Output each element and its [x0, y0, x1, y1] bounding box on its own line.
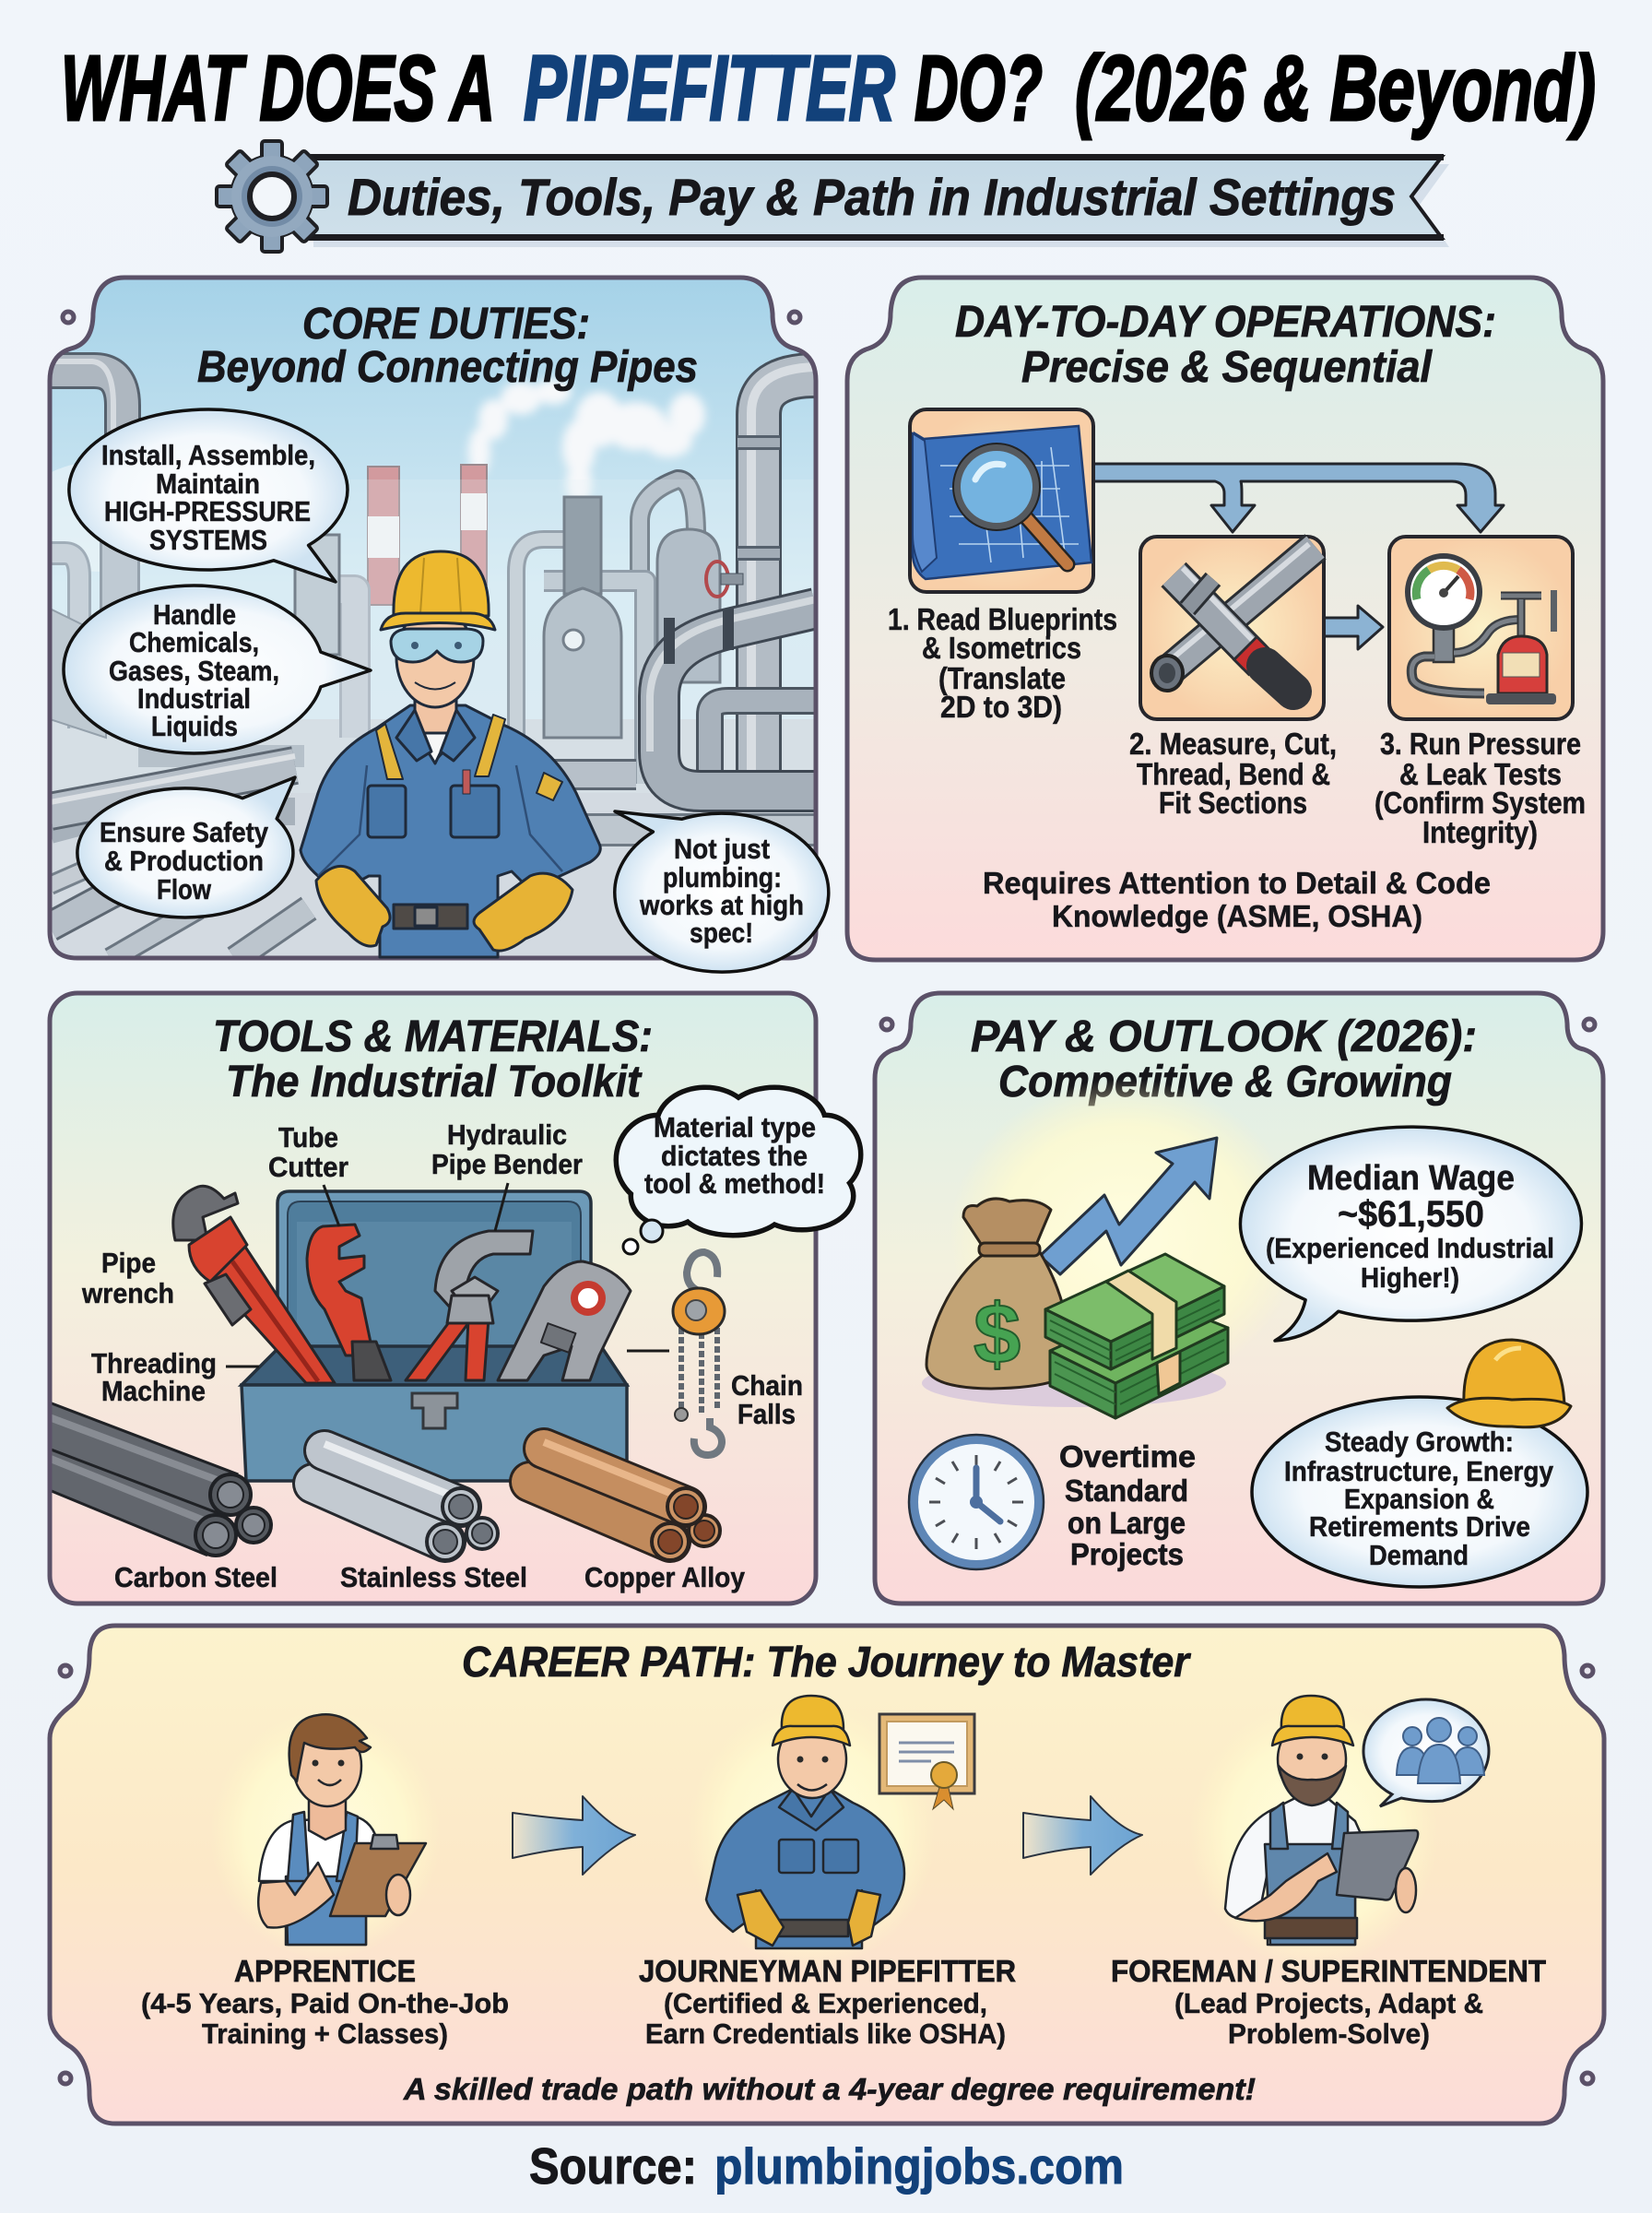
bubble: handle chemicals: Chemicals,	[129, 626, 259, 658]
stainless steel pipes	[313, 1444, 498, 1560]
panel: day-to-day operations	[847, 278, 1603, 960]
copper alloy pipes	[530, 1442, 720, 1560]
arrow: growth	[1040, 1138, 1217, 1274]
foreman text: FOREMAN / SUPERINTENDENT	[1111, 1954, 1546, 1988]
figure: foreman	[1225, 1696, 1418, 1945]
icon: tube cutter	[307, 1225, 391, 1380]
bubble: ensure safety: Flow	[157, 873, 212, 905]
illustration: pipefitter worker	[301, 551, 600, 957]
panel: core duties	[18, 278, 829, 972]
tool labels: Stainless Steel	[340, 1561, 527, 1593]
tool labels: Threading	[91, 1347, 217, 1379]
heading: Competitive & Growing	[998, 1058, 1452, 1106]
shadow under money	[922, 1359, 1226, 1407]
journeyman text: Earn Credentials like OSHA)	[645, 2018, 1006, 2050]
journeyman text: JOURNEYMAN PIPEFITTER	[639, 1954, 1016, 1988]
bubble: steady growth: Expansion &	[1344, 1483, 1494, 1515]
footnote: Requires Attention to Detail & Code	[983, 866, 1491, 900]
thought cloud: tool & method!	[644, 1167, 825, 1200]
icon: certificate	[879, 1714, 974, 1809]
icon: chain falls hoist	[673, 1252, 725, 1455]
bubble: not just plumbing: plumbing:	[663, 861, 782, 893]
bubble: install assemble: Install, Assemble,	[101, 439, 315, 471]
thought cloud: dictates the	[661, 1140, 808, 1172]
step 1 text: 1. Read Blueprints	[888, 602, 1117, 636]
foreman text: Problem-Solve)	[1228, 2018, 1430, 2050]
tagline: A skilled trade path without a 4-year degree requirement!	[403, 2072, 1256, 2106]
bubble: ensure safety	[77, 777, 295, 917]
bubble: install assemble: Maintain	[156, 467, 260, 500]
haze	[52, 479, 721, 784]
apprentice text: Training + Classes)	[202, 2018, 448, 2050]
icon: threading machine	[498, 1261, 631, 1380]
heading: TOOLS & MATERIALS:	[213, 1012, 653, 1061]
rivets	[881, 1019, 1595, 1030]
bubble: not just plumbing: spec!	[690, 917, 753, 949]
tool labels: Copper Alloy	[584, 1561, 746, 1593]
title: WHAT DOES A	[61, 37, 495, 140]
glows	[210, 1701, 1438, 1969]
bubble: handle chemicals: Liquids	[151, 710, 238, 742]
rivets	[60, 1665, 1593, 2084]
foreman text: (Lead Projects, Adapt &	[1174, 1987, 1483, 2019]
step 1 text: (Translate	[938, 661, 1066, 695]
tool labels: Pipe	[101, 1247, 156, 1279]
step 3 text: & Leak Tests	[1399, 757, 1562, 791]
panel: tools and materials	[37, 993, 860, 1604]
bubble: handle chemicals: Gases, Steam,	[109, 655, 279, 687]
icon: pressure gauge and tank	[1389, 537, 1573, 719]
bubble: install assemble: HIGH-PRESSURE	[104, 495, 311, 527]
vessels and stack	[295, 497, 720, 738]
subtitle text: Duties, Tools, Pay & Path in Industrial Settings	[348, 168, 1396, 226]
step 3 text: (Confirm System	[1375, 786, 1586, 820]
arrow: blueprint to steps	[1093, 464, 1504, 532]
figure: journeyman	[706, 1696, 904, 1948]
icon: hydraulic pipe bender	[406, 1231, 533, 1380]
bubble: steady growth: Infrastructure, Energy	[1284, 1455, 1554, 1487]
journeyman text: (Certified & Experienced,	[664, 1987, 987, 2019]
apprentice text: APPRENTICE	[234, 1954, 416, 1988]
bubble: handle chemicals: Handle	[153, 598, 236, 631]
overtime text: Projects	[1070, 1537, 1184, 1571]
bubble: handle chemicals	[64, 586, 371, 753]
step 1 text	[888, 602, 1117, 724]
icon: gear	[217, 141, 327, 252]
thought cloud	[617, 1088, 860, 1254]
source line: plumbingjobs.com	[714, 2137, 1124, 2195]
step 2 text: Fit Sections	[1159, 786, 1307, 820]
journeyman text	[639, 1954, 1016, 2050]
step 3 text	[1375, 727, 1586, 849]
tool labels: Pipe Bender	[431, 1148, 583, 1180]
thought cloud: Material type	[654, 1111, 816, 1143]
tool labels: Machine	[101, 1375, 206, 1407]
tool labels	[81, 1118, 803, 1593]
step 2 text: 2. Measure, Cut,	[1129, 727, 1337, 761]
icon: cash stacks	[1045, 1254, 1228, 1418]
arrow: apprentice to journeyman	[513, 1796, 635, 1875]
far pipes	[50, 371, 123, 452]
arrow: step 2 to step 3	[1324, 606, 1383, 649]
icon: money bag: $	[974, 1287, 1021, 1381]
step 3 text: Integrity)	[1422, 815, 1538, 849]
source line: Source:	[529, 2137, 697, 2195]
carbon steel pipes	[37, 1413, 271, 1556]
overtime text	[1059, 1439, 1196, 1571]
overtime text: Standard	[1065, 1473, 1188, 1508]
heading: PAY & OUTLOOK (2026):	[971, 1012, 1477, 1061]
tool labels: Cutter	[268, 1151, 348, 1183]
right pipes	[50, 367, 816, 959]
bubble: steady growth: Retirements Drive	[1309, 1510, 1530, 1543]
icon: money bag	[926, 1199, 1070, 1389]
apprentice text: (4-5 Years, Paid On-the-Job	[141, 1987, 509, 2019]
tool labels: Hydraulic	[447, 1118, 567, 1151]
overtime text: on Large	[1068, 1506, 1186, 1540]
figure: apprentice	[258, 1714, 426, 1945]
source line	[529, 2137, 1124, 2195]
heading	[971, 1012, 1477, 1106]
bubble: steady growth: Demand	[1369, 1539, 1469, 1571]
bubble: median wage: Median Wage	[1307, 1159, 1515, 1198]
illustration: toolbox base	[242, 1385, 627, 1481]
tool labels: Carbon Steel	[114, 1561, 277, 1593]
icon: clock	[909, 1435, 1044, 1569]
tool labels: wrench	[81, 1277, 174, 1309]
foreman text	[1111, 1954, 1546, 2050]
heading: Beyond Connecting Pipes	[197, 343, 698, 392]
subtitle ribbon	[217, 141, 1449, 252]
bubble: ensure safety: & Production	[104, 845, 264, 877]
bubble: median wage: Higher!)	[1361, 1261, 1459, 1294]
bubble: install assemble	[69, 409, 348, 582]
bubble: install assemble: SYSTEMS	[149, 524, 267, 556]
heading: CAREER PATH: The Journey to Master	[462, 1638, 1191, 1686]
title: DO?	[914, 37, 1043, 140]
bubble: handle chemicals: Industrial	[137, 682, 251, 715]
icon: red valve wheel	[706, 562, 743, 597]
step 1 text: 2D to 3D)	[940, 690, 1062, 724]
panel border	[50, 993, 816, 1604]
bubble: median wage	[1240, 1127, 1581, 1341]
bubble: median wage: ~$61,550	[1338, 1194, 1484, 1235]
callout lines	[226, 1183, 669, 1367]
chimneys	[368, 465, 487, 605]
bubble: steady growth: Steady Growth:	[1325, 1426, 1514, 1458]
step 2 text: Thread, Bend &	[1137, 757, 1330, 791]
footnote: Knowledge (ASME, OSHA)	[1052, 899, 1422, 933]
heading	[955, 298, 1496, 392]
heading: DAY-TO-DAY OPERATIONS:	[955, 298, 1496, 347]
icon: team speech bubble	[1363, 1699, 1489, 1806]
illustration: refinery background	[18, 361, 816, 959]
icon: hard hat	[1447, 1340, 1571, 1427]
icon: blueprint with magnifier	[910, 409, 1093, 592]
title: PIPEFITTER	[524, 37, 895, 140]
heading: CORE DUTIES:	[302, 300, 590, 349]
heading: Precise & Sequential	[1021, 343, 1434, 392]
glow	[950, 1079, 1300, 1392]
icon: crossed pipes	[1140, 537, 1324, 719]
bubble: not just plumbing	[615, 811, 829, 972]
heading	[197, 300, 698, 392]
panel: career path	[50, 1626, 1604, 2124]
step 1 text: & Isometrics	[922, 631, 1081, 665]
arrow: journeyman to foreman	[1023, 1796, 1142, 1875]
bubble: not just plumbing: works at high	[639, 889, 804, 921]
step 2 text	[1129, 727, 1337, 820]
tool labels: Falls	[738, 1398, 796, 1430]
footnote	[983, 866, 1491, 933]
icon: pipe wrench	[173, 1186, 335, 1383]
tool labels: Tube	[278, 1121, 338, 1154]
step 3 text: 3. Run Pressure	[1380, 727, 1581, 761]
bubble: not just plumbing: Not just	[674, 833, 770, 865]
rivets	[63, 312, 800, 323]
heading	[213, 1012, 653, 1106]
tool labels: Chain	[731, 1369, 803, 1402]
panel: pay and outlook	[875, 993, 1603, 1604]
heading: The Industrial Toolkit	[226, 1058, 643, 1106]
bubble: steady growth	[1252, 1397, 1587, 1587]
illustration: toolbox interior	[242, 1346, 627, 1385]
illustration: toolbox lid	[277, 1191, 591, 1365]
title	[61, 37, 1596, 140]
overtime text: Overtime	[1059, 1439, 1196, 1473]
bubble: median wage: (Experienced Industrial	[1266, 1232, 1554, 1264]
apprentice text	[141, 1954, 509, 2050]
bubble: ensure safety: Ensure Safety	[100, 816, 269, 848]
